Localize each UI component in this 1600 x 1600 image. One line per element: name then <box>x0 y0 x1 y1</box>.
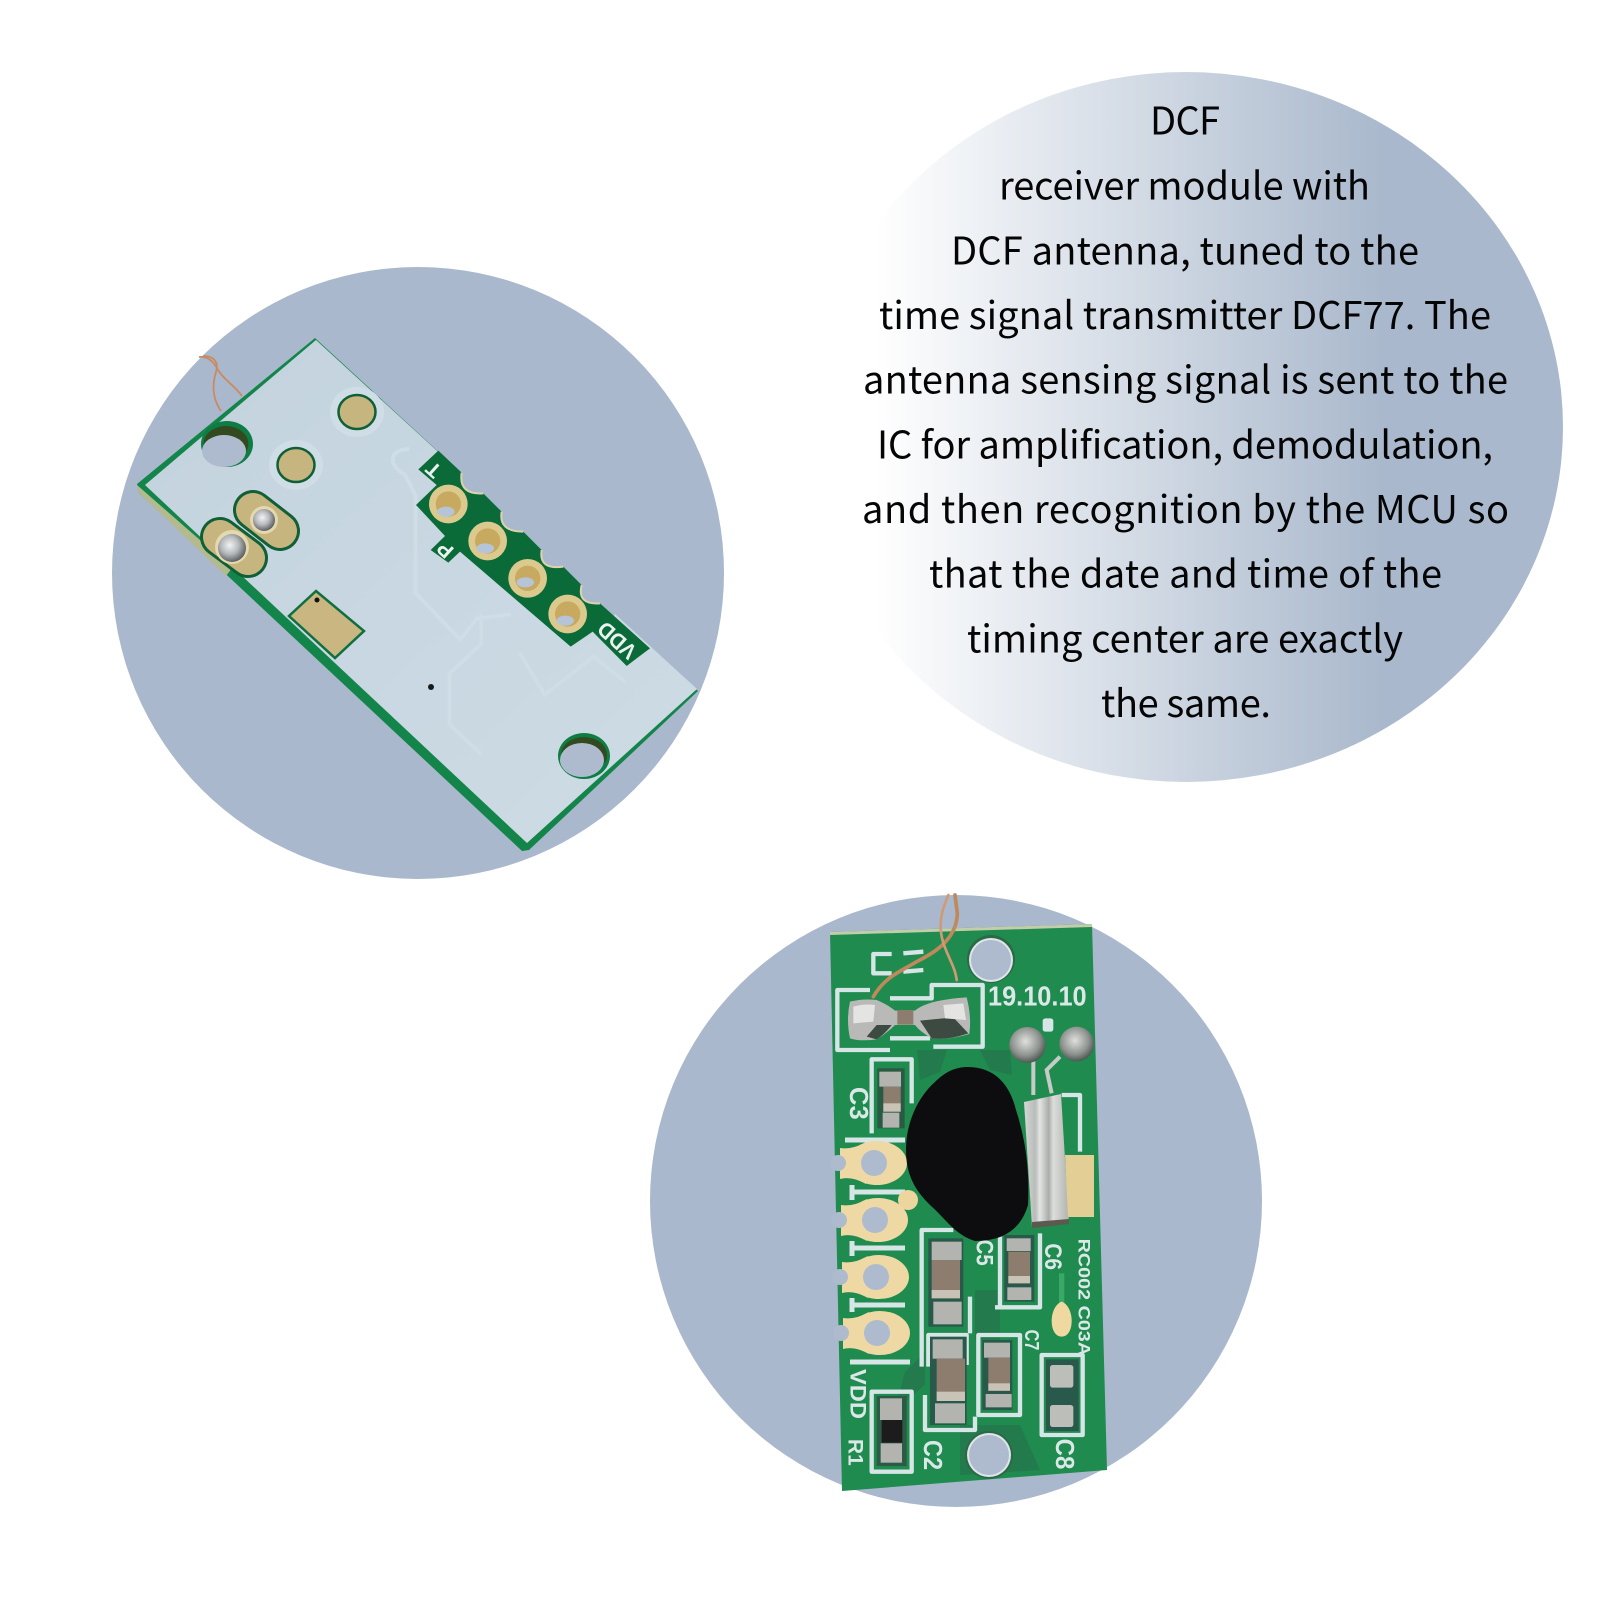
capacitor C6 <box>995 1233 1040 1307</box>
capacitor C7 <box>978 1335 1020 1415</box>
silk label P: P <box>433 536 458 563</box>
panel: description bubble <box>809 72 1563 782</box>
gold pad 1 <box>330 387 384 437</box>
text block: module description: IC for amplification, demodulation, <box>877 414 1493 469</box>
black epoxy IC blob <box>906 1067 1028 1241</box>
crystal can <box>1024 1094 1069 1228</box>
antenna wire, back view <box>199 356 242 411</box>
text block: module description: DCF <box>1150 90 1220 146</box>
soldered antenna inductor <box>848 997 970 1040</box>
capacitor C2 <box>925 1335 975 1430</box>
silk C6: C6 <box>1039 1243 1066 1270</box>
PCB board front <box>830 895 1107 1491</box>
text block: module description: receiver module with <box>999 156 1370 211</box>
text block: module description: antenna sensing signal is sent to the <box>863 350 1508 405</box>
mounting hole bottom <box>965 1431 1013 1479</box>
silk 19.10.10: 19.10.10 <box>988 981 1087 1012</box>
silk C2: C2 <box>918 1440 948 1470</box>
capsule pad with solder A <box>250 506 280 534</box>
silk label VDD: VDD <box>592 616 642 664</box>
panel: PCB back side photo circle <box>112 267 724 879</box>
through-hole pad 4 <box>548 595 587 633</box>
text block: module description: that the date and time of the <box>929 544 1442 599</box>
silk outline right of crystal <box>1062 1095 1080 1152</box>
text block: module description <box>862 90 1509 728</box>
text block: module description: and then recognition by the MCU so <box>862 479 1509 534</box>
via dot <box>428 684 434 690</box>
silk C8: C8 <box>1050 1439 1080 1469</box>
capacitor pads C8 <box>1042 1355 1083 1435</box>
gold teardrop test pad <box>1052 1273 1072 1337</box>
silk L1 marker <box>873 952 923 973</box>
silk R1: R1 <box>843 1439 867 1466</box>
connector pad 2 <box>831 1198 908 1242</box>
connector pad 1 <box>830 1141 907 1185</box>
connector strip with pads and labels <box>416 450 650 666</box>
text block: module description: time signal transmitter DCF77. The <box>879 285 1491 340</box>
connector pad 3 <box>832 1255 909 1299</box>
upper section parts <box>837 895 1094 1152</box>
through-hole pad 2 <box>468 522 507 560</box>
text block: module description: DCF antenna, tuned to the <box>951 220 1419 275</box>
mounting hole top left <box>201 421 253 467</box>
silver solder balls and crystal leads <box>1009 1018 1094 1095</box>
dark routed copper areas <box>895 1050 1040 1475</box>
connector pad 4 <box>833 1311 910 1355</box>
capsule pad with solder B <box>215 530 249 564</box>
antenna wires, front view <box>873 895 957 997</box>
rectangular gold pad <box>289 591 364 658</box>
silk label T: T <box>421 456 446 482</box>
silk RC002 C03A: RC002 C03A <box>1074 1239 1093 1356</box>
silk C5: C5 <box>971 1240 998 1266</box>
antenna coil footprint <box>837 985 983 1050</box>
silk C7: C7 <box>1020 1330 1042 1350</box>
mounting hole bottom right <box>558 733 610 779</box>
faint copper traces <box>393 449 625 754</box>
silk VDD: VDD <box>846 1369 871 1419</box>
resistor R1 <box>872 1392 912 1472</box>
silk C3: C3 <box>844 1087 874 1120</box>
text block: module description: the same. <box>1101 673 1271 728</box>
mounting hole top <box>967 935 1015 983</box>
lower section parts <box>843 1230 1093 1472</box>
text block: module description: timing center are exactly <box>967 608 1403 663</box>
gold rectangular pad <box>1065 1155 1094 1217</box>
silk connector pad frames <box>845 1140 910 1362</box>
capacitor C3 <box>872 1059 912 1133</box>
gold pad 2 <box>269 440 323 490</box>
PCB board back <box>137 338 698 851</box>
through-hole pad 1 <box>429 485 468 523</box>
through-hole pad 3 <box>508 559 547 598</box>
panel: PCB component side photo circle <box>650 895 1262 1507</box>
connector pads <box>830 1141 910 1355</box>
small gold pad by IC <box>898 1190 918 1210</box>
capacitor C4 <box>922 1230 970 1367</box>
